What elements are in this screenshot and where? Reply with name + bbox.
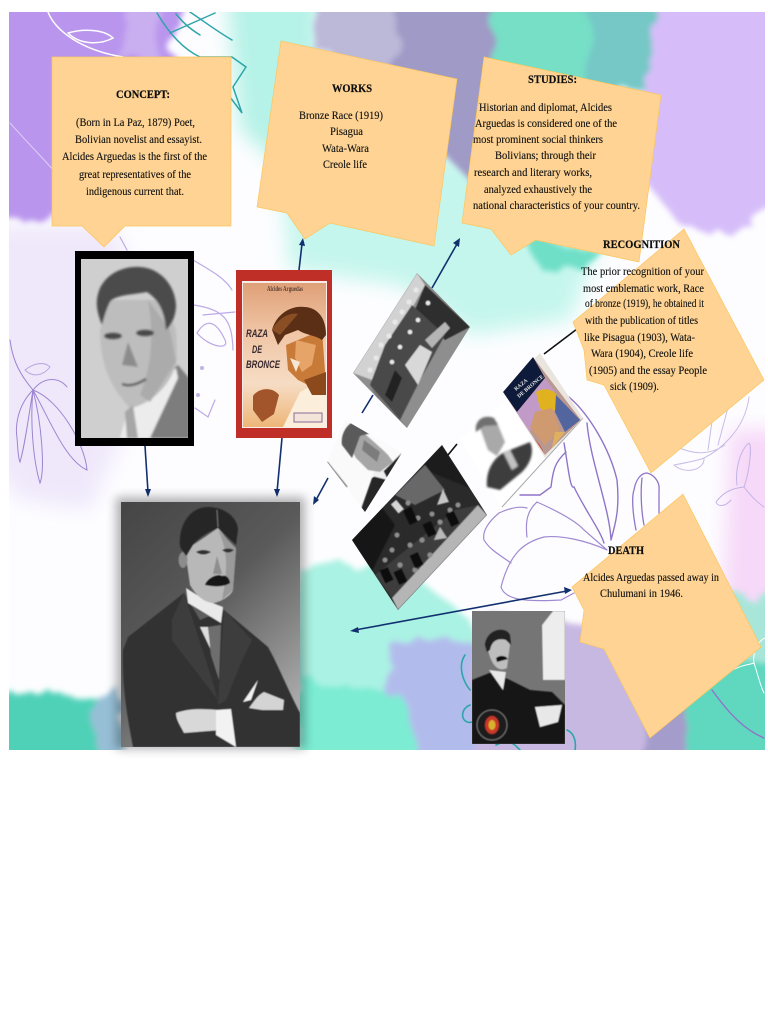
text: studies body: most prominent social thinkers	[473, 132, 603, 146]
text: studies body: Historian and diplomat, Alcides	[479, 100, 612, 114]
photo: second book cover: DE BRONCE	[516, 374, 545, 400]
heading: studies: STUDIES:	[528, 72, 577, 86]
text: works list: Wata-Wara	[322, 141, 370, 155]
text: recognition body	[581, 264, 707, 393]
text: concept body	[62, 115, 207, 198]
photo: portrait with Bolivian seal	[472, 611, 565, 744]
text: recognition body: Wara (1904), Creole life	[591, 346, 693, 360]
arrow: book to main photo	[274, 438, 282, 497]
photo: small rotated portrait	[327, 420, 402, 515]
arrow: book to works	[299, 238, 305, 270]
text: death body: Alcides Arguedas passed away in	[583, 570, 719, 584]
arrow: double-headed between main photo and death	[350, 587, 572, 633]
text: studies body: analyzed exhaustively the	[484, 182, 592, 196]
text: recognition body: (1905) and the essay People	[589, 363, 707, 377]
heading: works: WORKS	[332, 81, 372, 95]
photo: main portrait of Alcides Arguedas	[116, 497, 305, 749]
text: concept body: Bolivian novelist and essayist.	[75, 132, 202, 146]
text: concept body: (Born in La Paz, 1879) Poet,	[76, 115, 195, 129]
text: recognition body: most emblematic work, Race	[583, 281, 704, 295]
photo: Raza de Bronce book cover	[236, 270, 332, 438]
text: recognition body: with the publication of titles	[585, 313, 698, 327]
text: studies body: research and literary works,	[474, 165, 592, 179]
photo: second book cover	[503, 353, 583, 458]
photo: Raza de Bronce book cover: DE	[252, 344, 262, 356]
text: death body	[583, 570, 719, 600]
text: concept body: great representatives of the	[79, 167, 191, 181]
text: recognition body: The prior recognition of your	[581, 264, 704, 278]
text: works list	[299, 108, 383, 171]
text: death body: Chulumani in 1946.	[600, 586, 683, 600]
callout: death	[572, 494, 761, 738]
photo: Raza de Bronce book cover: RAZA	[246, 328, 268, 340]
text: works list: Bronze Race (1919)	[299, 108, 383, 122]
text: recognition body: like Pisagua (1903), Wata-	[584, 330, 695, 344]
photo: rotated portrait on white card	[460, 375, 583, 507]
photo: Raza de Bronce book cover: Alcides Arguedas	[267, 284, 303, 293]
callout: recognition	[573, 229, 764, 473]
heading: recognition: RECOGNITION	[603, 237, 680, 251]
callout: concept	[52, 57, 231, 247]
text: studies body: Bolivians; through their	[495, 148, 596, 162]
connector: recognition line	[544, 329, 577, 354]
background: watercolor wash and floral outlines	[0, 0, 768, 780]
arrow: stub between photos	[362, 395, 373, 413]
photo: rotated group photograph	[353, 273, 470, 428]
text: concept body: Alcides Arguedas is the first of the	[62, 149, 207, 163]
decorative leaves and flowers	[10, 12, 765, 750]
heading: concept: CONCEPT:	[116, 87, 170, 101]
text: studies body: national characteristics of your country.	[473, 198, 640, 212]
arrow: small portrait to main photo	[313, 478, 328, 505]
arrow: portrait to main photo	[145, 446, 151, 497]
text: studies body	[473, 100, 640, 212]
text: concept body: indigenous current that.	[86, 184, 184, 198]
photo: rotated dark group photograph	[352, 445, 487, 610]
photo: framed portrait	[75, 251, 194, 446]
heading: death: DEATH	[608, 543, 645, 557]
text: recognition body: sick (1909).	[610, 379, 659, 393]
photo: Raza de Bronce book cover: BRONCE	[246, 359, 280, 371]
text: works list: Pisagua	[330, 124, 364, 138]
callout: studies	[462, 57, 661, 262]
text: works list: Creole life	[323, 157, 367, 171]
photo: second book cover: RAZA	[513, 378, 529, 393]
callout: works	[257, 41, 457, 246]
connector: short black line	[448, 444, 457, 455]
text: studies body: Arguedas is considered one of the	[475, 116, 617, 130]
arrow: group photo to studies	[432, 238, 460, 288]
text: recognition body: of bronze (1919), he obtained it	[585, 296, 705, 310]
